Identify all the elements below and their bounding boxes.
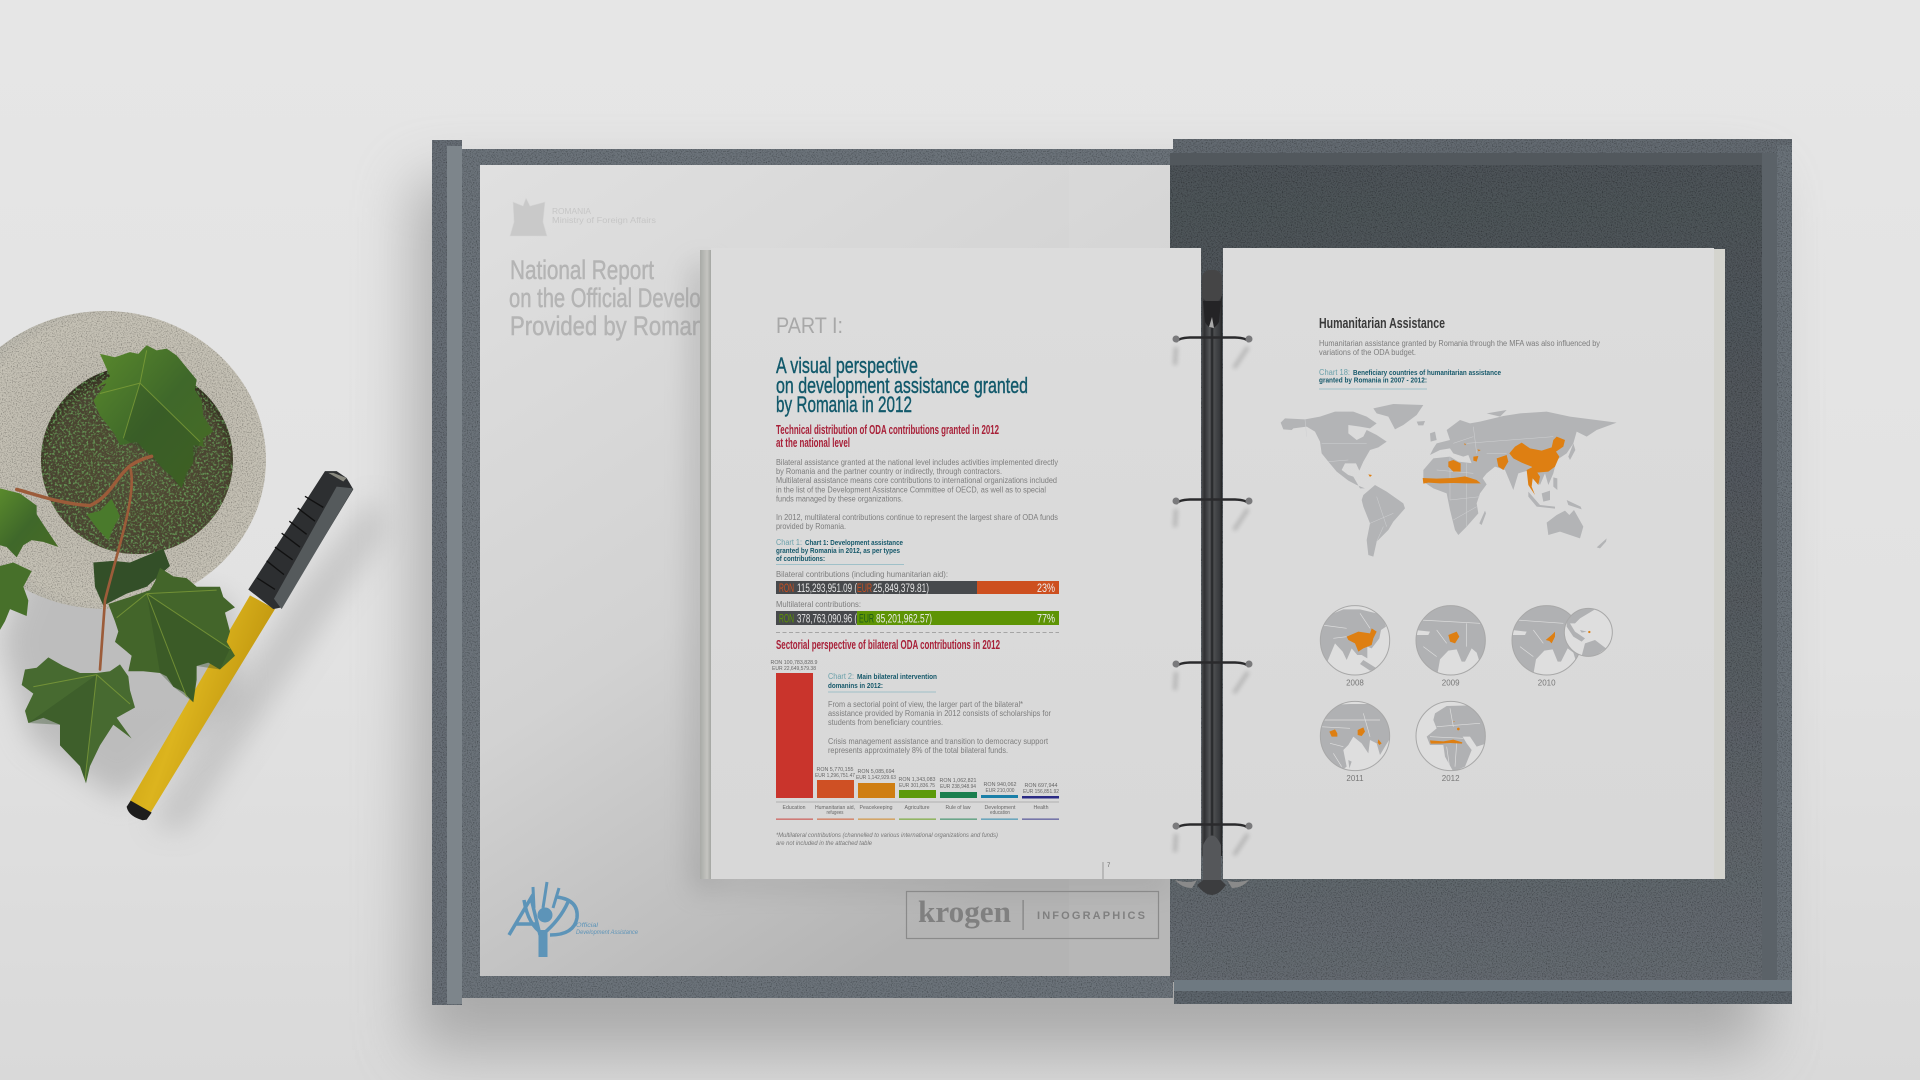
pen cap side [274, 487, 353, 609]
pen shadow [150, 495, 385, 830]
bar: health [1022, 783, 1059, 798]
tray right rim [1762, 145, 1792, 1003]
top clasp [1202, 270, 1222, 328]
category labels: Rule of law [946, 805, 971, 811]
translucent fold [1069, 165, 1170, 976]
pen barrel [130, 595, 275, 814]
bar: humanitarian [815, 767, 855, 798]
part heading: PART I: [776, 313, 843, 338]
main title: on development assistance granted [776, 373, 1028, 398]
soil [41, 366, 233, 554]
chart 2 heading: domanins in 2012: [828, 681, 883, 690]
chart 1: bilateral bar: 115,293,951.09 ( [797, 583, 857, 595]
ring 1 [1172, 336, 1252, 368]
chart 2 heading: Chart 2: [828, 672, 854, 681]
page number [1103, 862, 1111, 879]
infographics wordmark: INFOGRAPHICS [1037, 910, 1145, 922]
highlighted countries [1368, 437, 1565, 495]
bar: humanitarian: RON 5,770,155 [816, 767, 854, 773]
category labels: Agriculture [904, 805, 930, 811]
chart 1 heading: of contributions: [776, 554, 825, 563]
chart 2 text [828, 700, 1051, 755]
chart 2 text: assistance provided by Romania in 2012 consists of scholarships for [828, 709, 1051, 718]
stem [17, 456, 152, 670]
inset globe: Haiti [1564, 608, 1612, 657]
chart 2 text: represents approximately 8% of the total bilateral funds. [828, 746, 1008, 755]
report title: Provided by Romania in 2012 [510, 311, 800, 341]
chart 2 heading [828, 672, 937, 692]
page stack edge [700, 250, 712, 879]
ring 4 [1172, 822, 1252, 855]
cover frame [462, 149, 1173, 998]
metal bar [1202, 296, 1222, 856]
chart 18 heading [1319, 368, 1501, 390]
world map [1281, 404, 1617, 557]
intro text: by Romania and the partner country or indirectly, through contractors. [776, 467, 1002, 476]
ministry crest [510, 198, 547, 236]
chart 1: bilateral bar: 25,849,379.81) [873, 583, 929, 595]
leaves [0, 345, 235, 783]
ring 3 [1172, 660, 1252, 693]
chart 2: sector bar chart [770, 660, 1059, 820]
pen [127, 471, 353, 820]
chart 1: bilateral bar: 23% [1037, 583, 1055, 595]
globe 2009 [1415, 606, 1488, 687]
left page [700, 248, 1201, 879]
report title: National Report [510, 255, 654, 285]
bottom clasp [1175, 836, 1249, 895]
bilateral label: Bilateral contributions (including humanitarian aid): [776, 570, 948, 579]
logo caption: Official [576, 922, 599, 929]
report title: on the Official Development Assistance [509, 283, 859, 313]
intro text: provided by Romania. [776, 522, 846, 531]
chart 1: bilateral bar [776, 570, 1059, 595]
page sheet [711, 248, 1201, 879]
bar: education: EUR 22,649,579.38 [772, 666, 816, 672]
category labels: refugees [826, 810, 844, 816]
globe 2011 [1318, 701, 1390, 783]
category labels: education [990, 810, 1010, 816]
bar: rule of law: EUR 238,948.94 [940, 784, 976, 790]
multilateral label: Multilateral contributions: [776, 600, 861, 609]
footnote: are not included in the attached table [776, 840, 872, 847]
krogen wordmark: krogen [918, 894, 1011, 929]
regional globes [1317, 606, 1612, 783]
page stack edge [1714, 249, 1725, 879]
logo caption: Development Assistance [576, 929, 639, 936]
bar: peacekeeping: RON 5,085,694 [858, 769, 895, 775]
bar: education: RON 100,783,828.9 [770, 660, 818, 666]
chart 1: multilateral bar [776, 600, 1059, 626]
cover spine [432, 140, 462, 1005]
binder: right tray [1170, 139, 1792, 1004]
chart 1 heading: Chart 1: [776, 538, 802, 547]
red subheading: at the national level [776, 436, 850, 450]
chart 1: multilateral bar: EUR [859, 614, 874, 626]
intro text [776, 458, 1058, 531]
category labels: Development [984, 805, 1016, 811]
cover paper [480, 165, 1170, 976]
category labels: Peacekeeping [860, 805, 893, 811]
section text [1319, 339, 1600, 357]
krogen logo box [906, 892, 1158, 938]
intro text: funds managed by these organizations. [776, 494, 903, 504]
chart 1: multilateral bar: 378,763,090.96 ( [797, 614, 857, 626]
section text: Humanitarian assistance granted by Romania through the MFA was also influenced by [1319, 339, 1600, 348]
leaf veins [33, 350, 230, 780]
intro text: Bilateral assistance granted at the national level includes activities implemented directly [776, 458, 1058, 467]
map land [1281, 404, 1617, 557]
chart 18 heading: Beneficiary countries of humanitarian assistance [1353, 368, 1501, 377]
bar: development education: EUR 210,000 [986, 788, 1015, 794]
bar: health: RON 697,944 [1024, 783, 1058, 789]
leaf: top [93, 345, 213, 488]
report title [509, 255, 859, 341]
footnote [776, 832, 998, 847]
chart 1 heading [776, 538, 904, 565]
category labels: Humanitarian aid, [815, 805, 855, 811]
main title [776, 353, 1028, 417]
category labels: Education [782, 805, 806, 811]
chart 1 heading: granted by Romania in 2012, as per types [776, 546, 900, 555]
bar: humanitarian: EUR 1,296,751.47 [815, 773, 855, 779]
sectorial heading: Sectorial perspective of bilateral ODA contributions in 2012 [776, 638, 1000, 652]
pen end cap [127, 801, 152, 820]
bar: rule of law: RON 1,062,821 [940, 778, 977, 784]
pen grip [248, 471, 353, 609]
folder shadow [415, 180, 1760, 1050]
tray interior [1170, 160, 1764, 982]
plant shadow [0, 560, 240, 800]
footnote: *Multilateral contributions (channelled to various international organizations and funds) [776, 832, 998, 839]
logo mark [509, 882, 577, 957]
globe 2012 [1416, 701, 1487, 783]
chart 1: multilateral bar: 85,201,962.57) [876, 614, 932, 626]
section heading: Humanitarian Assistance [1319, 315, 1445, 332]
label 2009: 2009 [1442, 678, 1460, 687]
chart 1: bilateral bar: EUR [857, 583, 872, 595]
label 2008: 2008 [1346, 678, 1364, 687]
chart 1: bilateral bar: RON [779, 583, 794, 595]
chart 2 text: Crisis management assistance and transition to democracy support [828, 737, 1049, 746]
chart 1 heading: Chart 1: Development assistance [805, 538, 903, 547]
chart 1: multilateral bar: 77% [1037, 614, 1055, 626]
intro text: Multilateral assistance means core contributions to international organizations included [776, 476, 1057, 485]
main title: A visual perspective [776, 353, 918, 378]
chart 2 heading: Main bilateral intervention [857, 672, 937, 681]
binder spine mechanism [1175, 270, 1249, 895]
bar: education [770, 660, 818, 798]
category colour lines [776, 818, 1059, 820]
globe 2008 [1317, 606, 1390, 687]
ring 2 [1172, 498, 1252, 530]
bar: development education [981, 782, 1018, 798]
pen grip ribs [257, 496, 323, 589]
ministry name: Ministry of Foreign Affairs [552, 215, 656, 225]
bar: agriculture: RON 1,343,083 [898, 777, 936, 783]
ministry name [552, 206, 656, 225]
chart 2 text: From a sectorial point of view, the larger part of the bilateral* [828, 700, 1023, 709]
leaf shading [28, 383, 230, 780]
page sheet [1223, 248, 1714, 879]
bar: peacekeeping: EUR 1,142,929.63 [856, 775, 896, 781]
category labels [782, 805, 1049, 816]
leaf: large [108, 568, 235, 702]
red subheading: Technical distribution of ODA contributions granted in 2012 [776, 423, 999, 437]
globe 2010 [1512, 606, 1612, 687]
ministry name: ROMANIA [552, 206, 591, 216]
leaf: lower left [0, 563, 32, 630]
bar: agriculture [898, 777, 936, 798]
chart 2 text: students from beneficiary countries. [828, 718, 943, 727]
map borders [1305, 419, 1553, 542]
bar: peacekeeping [856, 769, 896, 798]
intro text: in the list of the Development Assistance Committee of OECD, as well as to special [776, 486, 1046, 494]
leaf: small centre [87, 499, 120, 540]
leaf: dark centre [93, 549, 170, 606]
bar: health: EUR 156,851.92 [1023, 789, 1059, 795]
bar: development education: RON 940,062 [984, 782, 1017, 788]
binder rings [1172, 336, 1252, 855]
category labels: Health [1034, 805, 1049, 811]
section text: variations of the ODA budget. [1319, 348, 1416, 357]
bar: rule of law [940, 778, 977, 798]
chart 18 heading: Chart 18: [1319, 368, 1350, 377]
page number: 7 [1107, 863, 1111, 869]
tray bottom rim [1174, 980, 1792, 1004]
right page [1223, 248, 1725, 879]
AID logo [509, 882, 639, 957]
concrete pot [0, 311, 266, 609]
chart 18 heading: granted by Romania in 2007 - 2012: [1319, 376, 1427, 384]
red subheading [776, 423, 999, 450]
label 2011: 2011 [1346, 774, 1364, 783]
bar: agriculture: EUR 301,836.75 [899, 783, 935, 789]
logo caption [576, 922, 639, 936]
leaf: left [0, 488, 58, 557]
chart 1: multilateral bar: RON [779, 614, 794, 626]
binder: left cover [432, 140, 1173, 1005]
leaf: bottom [22, 657, 135, 783]
label 2012: 2012 [1442, 774, 1460, 783]
plant pot with leaves and pen [0, 311, 385, 830]
intro text: In 2012, multilateral contributions continue to represent the largest share of ODA funds [776, 513, 1058, 522]
tray top rim [1170, 139, 1792, 165]
main title: by Romania in 2012 [776, 392, 912, 417]
page drop shadow on cover [692, 265, 1170, 890]
label 2010: 2010 [1538, 678, 1556, 687]
